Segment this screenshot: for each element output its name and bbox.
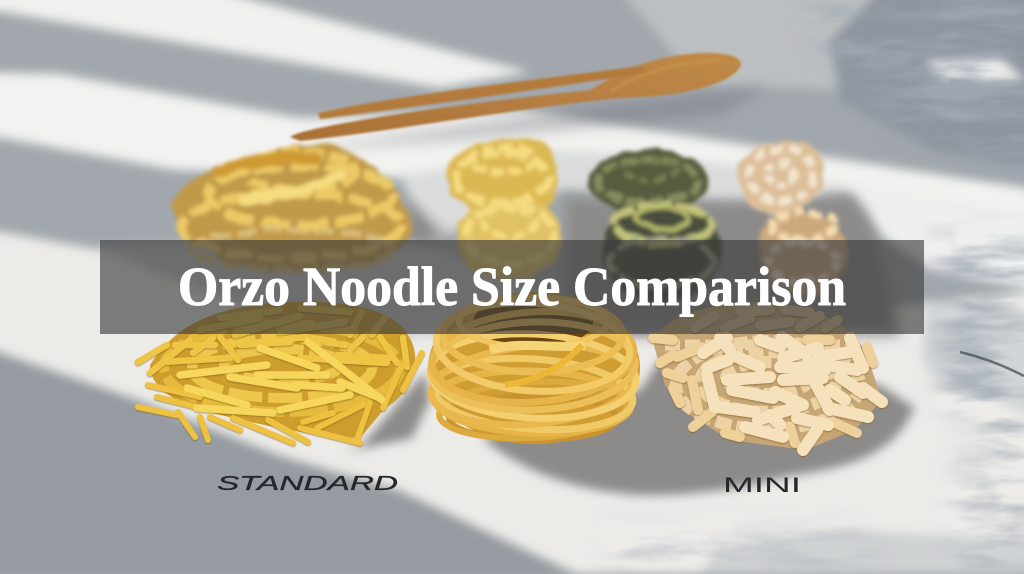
background row: green spinach nests [588,149,722,302]
dim grains under the banner [200,308,385,335]
dim grains under the banner [695,310,838,328]
upper grains [138,337,407,373]
background row: whole-grain mini mounds [737,141,847,295]
bottom pile: standard orzo [138,302,422,443]
bottom nest: tagliatelle coil [428,292,640,444]
background row: yellow small nests [445,139,561,280]
rear grains [653,338,873,443]
wooden spoon [290,53,770,150]
front grains [703,337,882,450]
background row: large standard nest [172,143,412,272]
marble veins [614,0,1024,568]
bottom pile: mini orzo [652,302,882,450]
outer lower grains [138,353,422,443]
label: STANDARD: STANDARD [217,473,398,495]
top bright grains [180,342,382,413]
shadows beneath nests [345,195,915,495]
title banner [100,240,924,334]
title: Orzo Noodle Size Comparison [178,256,846,317]
label: MINI: MINI [723,474,801,497]
